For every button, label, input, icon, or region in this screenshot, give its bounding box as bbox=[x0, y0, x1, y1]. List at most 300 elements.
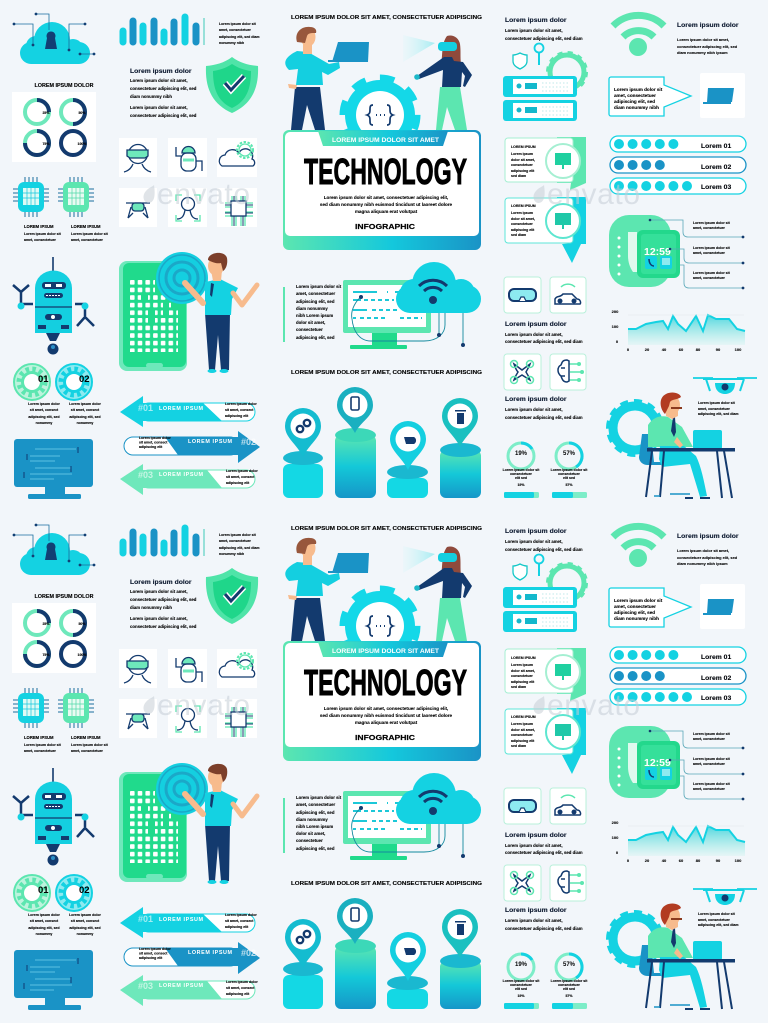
text block: callout 2: LOREM IPSUM bbox=[511, 204, 536, 208]
chart axis labels: 0 bbox=[616, 850, 619, 855]
arrow 02 text: sit amet, consect bbox=[139, 440, 168, 444]
text block: callout 2: LOREM IPSUM bbox=[511, 715, 536, 719]
text block: tiles 2: consectetuer adipiscing elit, sed diam bbox=[505, 926, 583, 931]
man with touch target bbox=[156, 252, 257, 373]
text block: wifi: Lorem ipsum dolor sit amet, bbox=[677, 37, 729, 42]
tablet bbox=[119, 261, 187, 371]
smartwatch bbox=[609, 726, 680, 798]
icon: chip cyan bbox=[13, 177, 49, 217]
pill meters bbox=[610, 647, 746, 705]
text block: title body: Lorem ipsum dolor sit amet, consectetuer adipiscing elit, bbox=[324, 706, 448, 711]
heading: top center: LOREM IPSUM DOLOR SIT AMET, CONSECTETUER ADIPISCING bbox=[291, 15, 482, 21]
text block: shield: Lorem ipsum dolor bbox=[130, 68, 192, 75]
pill labels: Lorem 03 bbox=[701, 695, 731, 702]
ring labels: Lorem ipsum dolor sit bbox=[551, 979, 588, 983]
text block: callout 2 bbox=[511, 715, 536, 748]
icon tiles bbox=[504, 788, 586, 901]
watermark icons bbox=[144, 185, 545, 203]
text block: tiles 1: consectetuer adipiscing elit, sed diam bbox=[505, 339, 583, 344]
bar chart bbox=[123, 528, 204, 556]
progress rings and bars bbox=[504, 954, 587, 1009]
text block: servers: Lorem ipsum dolor bbox=[505, 528, 567, 535]
donut values bbox=[42, 111, 87, 146]
icon: chip mint bbox=[58, 688, 94, 728]
text block: callout 1: Lorem ipsum bbox=[511, 663, 533, 667]
icon: monitor bbox=[14, 950, 93, 1010]
map pins bbox=[285, 898, 478, 981]
arrow 02 text: LOREM IPSUM bbox=[188, 950, 232, 956]
arrow 03 text: sit amet, consect bbox=[226, 986, 255, 990]
text block: bars note: Lorem ipsum dolor sit bbox=[219, 533, 257, 537]
text block: drone: amet, consectetuer bbox=[698, 918, 731, 922]
arrow 02 text bbox=[139, 436, 256, 449]
text block: desktop: consectetuer bbox=[296, 838, 323, 843]
text block: tiles 2: Lorem ipsum dolor sit amet, bbox=[505, 918, 563, 923]
text block: gears bbox=[28, 402, 101, 425]
arrow 02 bbox=[124, 431, 260, 463]
text block: gears: Lorem ipsum dolor bbox=[28, 913, 60, 917]
text block: gears: Lorem ipsum dolor bbox=[69, 913, 101, 917]
heading: donuts: LOREM IPSUM DOLOR bbox=[34, 83, 94, 89]
arrow 02 text: #02 bbox=[241, 437, 256, 447]
donut charts bbox=[12, 603, 96, 673]
man with laptop bbox=[285, 27, 369, 130]
text block: shield bbox=[130, 579, 197, 629]
title: TECHNOLOGY bbox=[304, 662, 467, 703]
ring labels bbox=[503, 451, 588, 487]
text block: desktop: adipiscing elit, sed bbox=[296, 846, 335, 851]
text block: bars note bbox=[219, 22, 259, 45]
cylinder chart bbox=[283, 939, 481, 1009]
text block: callout 2: adipiscing elit bbox=[511, 228, 535, 232]
arrow 01 bbox=[120, 907, 255, 938]
pill labels: Lorem 01 bbox=[701, 654, 731, 661]
card tab label: LOREM IPSUM DOLOR SIT AMET bbox=[332, 648, 439, 655]
text block: desktop: diam nonummy bbox=[296, 306, 328, 311]
callout ribbon cyan bbox=[505, 197, 586, 263]
text block: tiles 1 bbox=[505, 321, 583, 344]
text block: title body: magna aliquam erat volutpat bbox=[355, 720, 418, 725]
text block: chips: amet, consectetuer bbox=[24, 749, 57, 753]
text block: gears: Lorem ipsum dolor bbox=[69, 402, 101, 406]
chart axis labels: 40 bbox=[662, 858, 667, 863]
text block: watch notes: amet, consectetuer bbox=[693, 787, 726, 791]
text block: servers: consectetuer adipiscing elit, sed diam bbox=[505, 36, 583, 41]
gear 01 bbox=[14, 364, 50, 400]
arrow 03 bbox=[120, 464, 255, 495]
callout ribbon cyan bbox=[505, 708, 586, 774]
text block: shield: Lorem ipsum dolor bbox=[130, 579, 192, 586]
text block: callout 1: sed diam bbox=[511, 685, 526, 689]
text block: shield: Lorem ipsum dolor sit amet, bbox=[130, 78, 188, 83]
text block: gears: Lorem ipsum dolor bbox=[28, 402, 60, 406]
arrow 02 text: #02 bbox=[241, 948, 256, 958]
chart axis labels bbox=[612, 309, 742, 352]
ring labels: consectetuer bbox=[558, 983, 581, 987]
text block: shield: Lorem ipsum dolor sit amet, bbox=[130, 589, 188, 594]
text block: laptop callout: diam nonummy nibh bbox=[614, 616, 659, 621]
text block: desktop: diam nonummy bbox=[296, 817, 328, 822]
chart axis labels: 200 bbox=[612, 820, 619, 825]
main title card bbox=[283, 78, 481, 250]
ring labels: 57% bbox=[563, 962, 576, 968]
pill labels: Lorem 01 bbox=[701, 143, 731, 150]
text block: shield: consectetuer adipiscing elit, sed bbox=[130, 597, 197, 602]
text block: desktop: dolor sit amet, bbox=[296, 831, 325, 836]
desktop and wifi cloud bbox=[284, 773, 481, 860]
chart axis labels: 20 bbox=[645, 858, 650, 863]
text block: watch notes: Lorem ipsum dolor sit bbox=[693, 246, 731, 250]
icon: monitor bbox=[14, 439, 93, 499]
ring labels: consectetuer bbox=[510, 472, 533, 476]
ring labels: Lorem ipsum dolor sit bbox=[551, 468, 588, 472]
text block: chips: Lorem ipsum dolor sit bbox=[71, 743, 109, 747]
text block: callout 1: adipiscing elit bbox=[511, 169, 535, 173]
text block: bars note: nonummy nibh bbox=[219, 552, 244, 556]
text block: desktop: nibh Lorem ipsum bbox=[296, 313, 333, 318]
text block: desktop: Lorem ipsum dolor sit bbox=[296, 795, 342, 800]
text block: gears: nonummy bbox=[77, 421, 93, 425]
text block: watch notes: amet, consectetuer bbox=[693, 276, 726, 280]
arrow 03 text: LOREM IPSUM bbox=[159, 983, 204, 989]
chart axis labels: 80 bbox=[696, 347, 701, 352]
text block: shield: consectetuer adipiscing elit, sed bbox=[130, 86, 197, 91]
icon grid bbox=[119, 138, 257, 227]
pill labels bbox=[701, 143, 731, 191]
arrow 03 text: adipiscing elit bbox=[226, 481, 250, 485]
text block: laptop callout: diam nonummy nibh bbox=[614, 105, 659, 110]
ring labels: 57% bbox=[565, 483, 573, 487]
icon: shield bbox=[206, 57, 258, 113]
text block: bars note: amet, consectetuer bbox=[219, 539, 252, 543]
ring labels: consectetuer bbox=[558, 472, 581, 476]
gear labels bbox=[38, 885, 90, 896]
arrow 03 text: adipiscing elit bbox=[226, 992, 250, 996]
text block: tiles 1: Lorem ipsum dolor sit amet, bbox=[505, 843, 563, 848]
text block: laptop callout: adipiscing elit, sed bbox=[614, 610, 655, 615]
chart axis labels: 60 bbox=[679, 347, 684, 352]
text block: drone: Lorem ipsum dolor sit bbox=[698, 912, 736, 916]
text block: laptop callout: Lorem ipsum dolor sit bbox=[614, 598, 663, 603]
text block: desktop: consectetuer bbox=[296, 327, 323, 332]
arrow 01 bbox=[120, 396, 255, 427]
heading: cylinders: LOREM IPSUM DOLOR SIT AMET, CONSECTETUER ADIPISCING bbox=[291, 881, 482, 887]
watermark icons bbox=[144, 696, 545, 714]
smartwatch bbox=[609, 215, 680, 287]
text block: wifi: consectetuer adipiscing elit, sed bbox=[677, 555, 738, 560]
text block: bars note: amet, consectetuer bbox=[219, 28, 252, 32]
icon: shield bbox=[206, 568, 258, 624]
text block: desktop: adipiscing elit, sed bbox=[296, 299, 335, 304]
subtitle: INFOGRAPHIC bbox=[355, 733, 416, 742]
text block: drone bbox=[698, 912, 738, 927]
donut values: 25% bbox=[42, 622, 50, 626]
text block: bars note: Lorem ipsum dolor sit bbox=[219, 22, 257, 26]
text block: title body: magna aliquam erat volutpat bbox=[355, 209, 418, 214]
text block: wifi: consectetuer adipiscing elit, sed bbox=[677, 44, 738, 49]
text block: callout 1: LOREM IPSUM bbox=[511, 656, 536, 660]
text block: drone: adipiscing elit, sed diam bbox=[698, 412, 738, 416]
ring labels: consectetuer bbox=[510, 983, 533, 987]
text block: callout 1: dolor sit amet, bbox=[511, 669, 535, 673]
text block: desktop bbox=[296, 284, 342, 340]
text block: watch notes: amet, consectetuer bbox=[693, 762, 726, 766]
chart axis labels: 200 bbox=[612, 309, 619, 314]
text block: drone bbox=[698, 401, 738, 416]
text block: tiles 1: Lorem ipsum dolor bbox=[505, 832, 567, 839]
text block: gears: sit amet, consect bbox=[71, 408, 100, 412]
text block: watch notes: Lorem ipsum dolor sit bbox=[693, 782, 731, 786]
text block: drone: adipiscing elit, sed diam bbox=[698, 923, 738, 927]
pill labels: Lorem 03 bbox=[701, 184, 731, 191]
ring labels: elit sed bbox=[515, 987, 527, 991]
text block: watch notes bbox=[693, 221, 731, 280]
text block: callout 2: adipiscing elit bbox=[511, 739, 535, 743]
ring labels: elit sed bbox=[563, 987, 575, 991]
man with laptop bbox=[285, 538, 369, 641]
text block: chips: amet, consectetuer bbox=[71, 749, 104, 753]
icon tiles bbox=[504, 277, 586, 390]
text block: watch notes: Lorem ipsum dolor sit bbox=[693, 221, 731, 225]
chart axis labels: 100 bbox=[612, 835, 619, 840]
person at desk bbox=[608, 393, 735, 498]
arrow 01 text: sit amet, consect bbox=[225, 919, 254, 923]
ring labels: elit sed bbox=[515, 476, 527, 480]
area chart bbox=[628, 826, 745, 856]
text block: callout 1: dolor sit amet, bbox=[511, 158, 535, 162]
donut values: 50% bbox=[78, 111, 86, 115]
watch time: 12:59 bbox=[644, 246, 671, 258]
text block: laptop callout: amet, consectetuer bbox=[614, 93, 656, 98]
heading: top center: LOREM IPSUM DOLOR SIT AMET, CONSECTETUER ADIPISCING bbox=[291, 526, 482, 532]
person at desk bbox=[608, 904, 735, 1009]
text block: gears: sit amet, consect bbox=[71, 919, 100, 923]
gear labels: 01 bbox=[38, 374, 49, 385]
arrow 01 text: Lorem ipsum dolor bbox=[225, 402, 257, 406]
arrow 01 text: adipiscing elit bbox=[225, 414, 249, 418]
icon: servers bbox=[503, 554, 586, 632]
watermark left: envato bbox=[157, 689, 250, 722]
text block: callout 2: consectetuer bbox=[511, 222, 533, 226]
arrow 03 text: Lorem ipsum dolor bbox=[226, 980, 258, 984]
text block: servers: consectetuer adipiscing elit, sed diam bbox=[505, 547, 583, 552]
callout ribbon mint bbox=[505, 137, 586, 190]
chart axis labels: 90 bbox=[716, 858, 721, 863]
text block: chips: LOREM IPSUM bbox=[71, 735, 101, 740]
chart axis labels: 20 bbox=[645, 347, 650, 352]
text block: servers bbox=[505, 528, 583, 552]
text block: gears: nonummy bbox=[36, 932, 52, 936]
text block: callout 1: Lorem ipsum bbox=[511, 152, 533, 156]
text block: wifi bbox=[677, 533, 739, 566]
text block: chips: Lorem ipsum dolor sit bbox=[24, 232, 62, 236]
text block: shield: diam nonummy nibh bbox=[130, 605, 172, 610]
donut values bbox=[42, 622, 87, 657]
card tab label: LOREM IPSUM DOLOR SIT AMET bbox=[332, 137, 439, 144]
icon: wifi bbox=[613, 526, 664, 567]
text block: watch notes: Lorem ipsum dolor sit bbox=[693, 271, 731, 275]
gear labels bbox=[38, 374, 90, 385]
chart axis labels: 100 bbox=[612, 324, 619, 329]
text block: shield: consectetuer adipiscing elit, sed bbox=[130, 113, 197, 118]
text block: tiles 2 bbox=[505, 907, 583, 931]
arrow 03 text bbox=[138, 980, 258, 996]
text block: desktop: nibh Lorem ipsum bbox=[296, 824, 333, 829]
text block: chips: LOREM IPSUM bbox=[24, 735, 54, 740]
arrow 03 bbox=[120, 975, 255, 1006]
arrow 02 text: adipiscing elit bbox=[139, 445, 163, 449]
text block: callout 1 bbox=[511, 145, 536, 178]
arrow 01 text: sit amet, consect bbox=[225, 408, 254, 412]
text block: tiles 1: Lorem ipsum dolor sit amet, bbox=[505, 332, 563, 337]
arrow 03 text bbox=[138, 469, 258, 485]
donut values: 50% bbox=[78, 622, 86, 626]
icon: robot bbox=[13, 257, 94, 354]
donut values: 100% bbox=[78, 653, 87, 657]
text block: callout 2: dolor sit amet, bbox=[511, 728, 535, 732]
arrow 02 bbox=[124, 942, 260, 974]
text block: servers bbox=[505, 17, 583, 41]
text block: servers: Lorem ipsum dolor sit amet, bbox=[505, 28, 563, 33]
arrow 01 text: adipiscing elit bbox=[225, 925, 249, 929]
text block: watch notes bbox=[693, 732, 731, 791]
gear labels: 01 bbox=[38, 885, 49, 896]
watermark left: envato bbox=[157, 178, 250, 211]
text block: bars note: adipiscing elit, sed diam bbox=[219, 35, 259, 39]
text block: watch notes: amet, consectetuer bbox=[693, 737, 726, 741]
text block: bars note bbox=[219, 533, 259, 556]
donut charts bbox=[12, 92, 96, 162]
text block: desktop: adipiscing elit, sed bbox=[296, 335, 335, 340]
heading: cylinders: LOREM IPSUM DOLOR SIT AMET, CONSECTETUER ADIPISCING bbox=[291, 370, 482, 376]
text block: chips bbox=[24, 735, 109, 753]
man with touch target bbox=[156, 763, 257, 884]
text block: wifi: Lorem ipsum dolor sit amet, bbox=[677, 548, 729, 553]
arrow 03 text: Lorem ipsum dolor bbox=[226, 469, 258, 473]
text block: laptop callout: amet, consectetuer bbox=[614, 604, 656, 609]
text block: gears: nonummy bbox=[77, 932, 93, 936]
watch callout lines bbox=[649, 219, 744, 289]
text block: gears bbox=[28, 913, 101, 936]
arrow 01 text: #01 bbox=[138, 403, 153, 413]
text block: wifi: Lorem ipsum dolor bbox=[677, 22, 739, 29]
text block: shield: consectetuer adipiscing elit, sed bbox=[130, 624, 197, 629]
ring labels bbox=[503, 962, 588, 998]
text block: shield: Lorem ipsum dolor sit amet, bbox=[130, 105, 188, 110]
text block: shield: diam nonummy nibh bbox=[130, 94, 172, 99]
text block: drone: Lorem ipsum dolor sit bbox=[698, 401, 736, 405]
watch time: 12:59 bbox=[644, 757, 671, 769]
arrow 02 text bbox=[139, 947, 256, 960]
callout with laptop bbox=[609, 584, 745, 629]
gear labels: 02 bbox=[79, 374, 90, 385]
chart axis labels: 80 bbox=[696, 858, 701, 863]
arrow 02 text: sit amet, consect bbox=[139, 952, 168, 956]
heading: donuts: LOREM IPSUM DOLOR bbox=[34, 594, 94, 600]
tablet bbox=[119, 772, 187, 882]
icon: chip cyan bbox=[13, 688, 49, 728]
ring labels: elit sed bbox=[563, 476, 575, 480]
text block: laptop callout: adipiscing elit, sed bbox=[614, 99, 655, 104]
ring labels: 57% bbox=[565, 994, 573, 998]
icon grid bbox=[119, 649, 257, 738]
text block: title body bbox=[320, 195, 453, 214]
donut values: 75% bbox=[42, 653, 50, 657]
arrow 02 text: adipiscing elit bbox=[139, 956, 163, 960]
chart axis labels bbox=[612, 820, 742, 863]
arrow 03 text: LOREM IPSUM bbox=[159, 472, 204, 478]
text block: chips: Lorem ipsum dolor sit bbox=[24, 743, 62, 747]
text block: tiles 2: Lorem ipsum dolor bbox=[505, 907, 567, 914]
woman with vr headset bbox=[403, 546, 472, 641]
area chart bbox=[628, 315, 745, 345]
text block: callout 2: Lorem ipsum bbox=[511, 211, 533, 215]
text block: tiles 2: Lorem ipsum dolor sit amet, bbox=[505, 407, 563, 412]
text block: tiles 2 bbox=[505, 396, 583, 420]
text block: callout 1: sed diam bbox=[511, 174, 526, 178]
text block: laptop callout bbox=[614, 87, 663, 110]
title: TECHNOLOGY bbox=[304, 151, 467, 192]
arrow 01 text bbox=[138, 402, 257, 418]
text block: title body: sed diam nonummy nibh euismod tincidunt ut laoreet dolore bbox=[320, 713, 453, 718]
text block: callout 2: sed diam bbox=[511, 744, 526, 748]
text block: tiles 2: consectetuer adipiscing elit, sed diam bbox=[505, 415, 583, 420]
watermark right: envato bbox=[547, 689, 640, 722]
ring labels: 19% bbox=[515, 451, 528, 457]
text block: callout 2 bbox=[511, 204, 536, 237]
text block: tiles 1: consectetuer adipiscing elit, sed diam bbox=[505, 850, 583, 855]
ring labels: Lorem ipsum dolor sit bbox=[503, 468, 540, 472]
gear labels: 02 bbox=[79, 885, 90, 896]
text block: desktop bbox=[296, 795, 342, 851]
text block: gears: adipiscing elit, sed bbox=[28, 415, 60, 419]
text block: desktop: amet, consectetuer bbox=[296, 802, 335, 807]
ring labels: 19% bbox=[517, 994, 525, 998]
gear 02 bbox=[56, 875, 92, 911]
text block: tiles 1 bbox=[505, 832, 583, 855]
woman with vr headset bbox=[403, 35, 472, 130]
chart axis labels: 100 bbox=[735, 347, 742, 352]
text block: title body: sed diam nonummy nibh euismod tincidunt ut laoreet dolore bbox=[320, 202, 453, 207]
ring labels: 57% bbox=[563, 451, 576, 457]
arrow 01 text: LOREM IPSUM bbox=[159, 917, 204, 923]
text block: wifi: diam nonummy nibh ipsum bbox=[677, 561, 728, 566]
arrow 01 text: #01 bbox=[138, 914, 153, 924]
callout ribbon mint bbox=[505, 648, 586, 701]
text block: gears: sit amet, consect bbox=[30, 408, 59, 412]
text block: callout 1 bbox=[511, 656, 536, 689]
text block: callout 1: consectetuer bbox=[511, 674, 533, 678]
text block: callout 1: LOREM IPSUM bbox=[511, 145, 536, 149]
icon: robot bbox=[13, 768, 94, 866]
text block: gears: adipiscing elit, sed bbox=[69, 415, 101, 419]
pill labels bbox=[701, 654, 731, 702]
bar chart bbox=[123, 17, 204, 45]
text block: drone: amet, consectetuer bbox=[698, 407, 731, 411]
text block: gears: adipiscing elit, sed bbox=[69, 926, 101, 930]
text block: servers: Lorem ipsum dolor bbox=[505, 17, 567, 24]
text block: desktop: amet, consectetuer bbox=[296, 291, 335, 296]
arrow 02 text: Lorem ipsum dolor bbox=[139, 436, 171, 440]
text block: wifi bbox=[677, 22, 739, 55]
ring labels: 19% bbox=[515, 962, 528, 968]
progress rings and bars bbox=[504, 443, 587, 498]
icon: wifi bbox=[613, 15, 664, 56]
arrow 01 text: LOREM IPSUM bbox=[159, 406, 204, 412]
chart axis labels: 0 bbox=[627, 347, 630, 352]
icon: drone bbox=[693, 889, 757, 905]
chart axis labels: 60 bbox=[679, 858, 684, 863]
